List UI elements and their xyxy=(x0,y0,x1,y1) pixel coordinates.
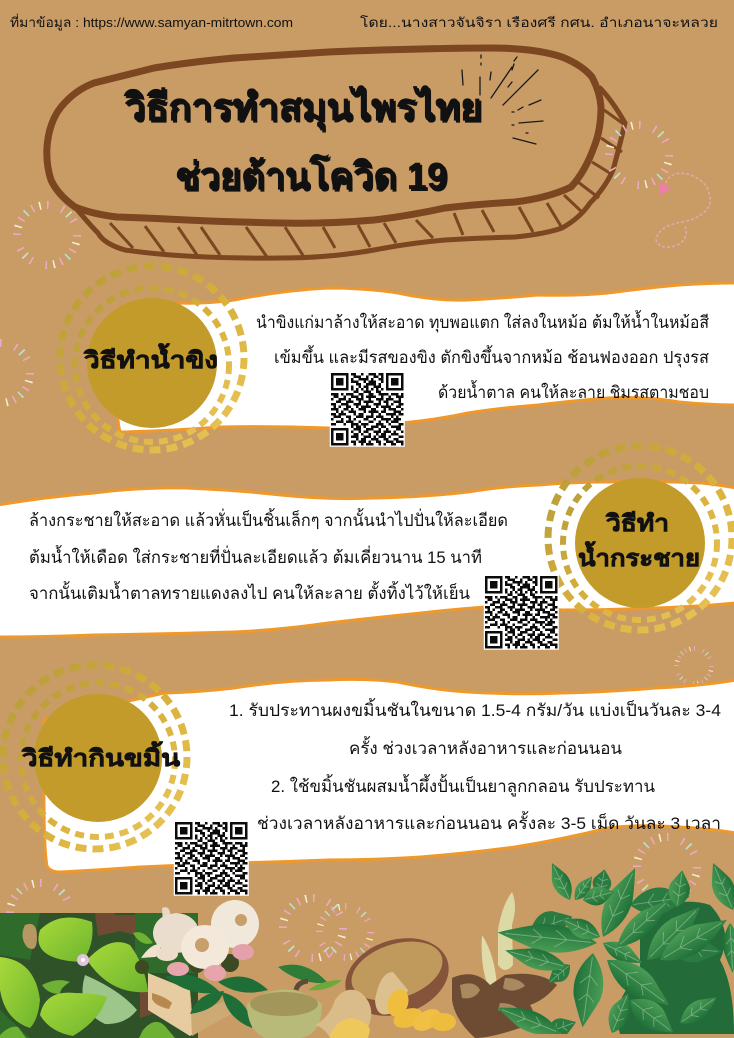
decorative tick ring top right xyxy=(609,125,669,185)
basil leaves xyxy=(165,975,268,1028)
pink dashed swirl xyxy=(656,173,710,247)
dark foliage behind xyxy=(618,902,734,1034)
QR code xyxy=(174,821,249,896)
photo: fingerroot rhizome xyxy=(452,892,557,1038)
body text: 1. รับประทานผงขมิ้นชันในขนาด 1.5-4 กรัม/วัน แบ่งเป็นวันละ 3-4 xyxy=(229,698,721,720)
white band xyxy=(0,482,734,637)
front leaves xyxy=(498,924,597,953)
decorative tick ring title left xyxy=(17,205,77,265)
title line two: ช่วยต้านโควิด 19 xyxy=(177,155,449,200)
heading: วิธีทำกินขมิ้น xyxy=(21,741,180,771)
panel: lemongrass drink xyxy=(0,446,734,650)
title banner xyxy=(47,48,625,258)
heading circle xyxy=(34,694,162,822)
title line one: วิธีการทำสมุนไพรไทย xyxy=(125,87,484,133)
banner underside with hatching xyxy=(75,87,625,258)
body text xyxy=(29,508,508,603)
body text: 2. ใช้ขมิ้นชันผสมน้ำผึ้งปั้นเป็นยาลูกกลอน รับประทาน xyxy=(271,774,655,797)
photo: green andrographis plant xyxy=(493,859,734,1038)
decorative tick ring band one left xyxy=(0,343,30,403)
body text: จากนั้นเติมน้ำตาลทรายแดงลงไป คนให้ละลาย ตั้งทิ้งไว้ให้เย็น xyxy=(29,581,470,603)
white band xyxy=(44,679,734,872)
panel: eating turmeric xyxy=(3,665,734,896)
body text: นำขิงแก่มาล้างให้สะอาด ทุบพอแตก ใส่ลงในหม้อ ต้มให้น้ำในหม้อสี xyxy=(256,310,710,333)
parsley xyxy=(135,954,239,974)
heading: วิธีทำน้ำขิง xyxy=(83,343,218,373)
heading xyxy=(578,511,700,571)
decorative tick rings bottom xyxy=(10,837,697,958)
body text: ต้มน้ำให้เดือด ใส่กระชายที่ปั่นละเอียดแล้ว ต้มเคี่ยวนาน 15 นาที xyxy=(29,545,482,567)
heading: วิธีทำ xyxy=(605,511,669,536)
banner outline xyxy=(47,48,601,223)
dashed gold rings xyxy=(3,665,187,849)
body text xyxy=(256,310,710,402)
author line: โดย...นางสาวจันจิรา เรืองศรี กศน. อำเภอนาจะหลวย xyxy=(360,15,718,30)
dashed gold rings xyxy=(548,446,732,630)
decorative tick ring mid right xyxy=(677,649,711,683)
heading circle xyxy=(87,298,217,428)
dashed gold rings xyxy=(60,266,244,450)
title banner: วิธีการทำสมุนไพรไทย xyxy=(123,85,482,131)
QR code xyxy=(484,575,559,650)
body text: ด้วยน้ำตาล คนให้ละลาย ชิมรสตามชอบ xyxy=(438,380,709,402)
title banner: ช่วยต้านโควิด 19 xyxy=(175,153,447,198)
heading circle xyxy=(575,478,705,608)
photo: green herb powder bowl xyxy=(247,965,342,1038)
panel: ginger drink xyxy=(60,266,734,450)
source line: ที่มาข้อมูล : https://www.samyan-mitrtown.com xyxy=(10,14,293,31)
body text: ล้างกระชายให้สะอาด แล้วหั่นเป็นชิ้นเล็กๆ จากนั้นนำไปปั่นให้ละเอียด xyxy=(29,508,508,530)
photo: green forest leaves xyxy=(0,913,198,1038)
burst marks xyxy=(462,55,543,144)
heading: น้ำกระชาย xyxy=(578,541,700,571)
body text: ครั้ง ช่วงเวลาหลังอาหารและก่อนนอน xyxy=(349,736,622,758)
body text xyxy=(229,698,721,833)
white band xyxy=(117,283,734,432)
wooden box xyxy=(148,973,233,1036)
garlic bulbs xyxy=(153,900,259,969)
photo: ginger and powder bowl xyxy=(315,925,459,1038)
photo: garlic, box and herbs xyxy=(135,900,268,1036)
QR code xyxy=(330,372,405,447)
body text: เข้มขึ้น และมีรสของขิง ตักขิงขึ้นจากหม้อ ช้อนฟองออก ปรุงรส xyxy=(274,345,710,368)
garlic cloves xyxy=(141,944,254,981)
back leaves xyxy=(525,868,723,1038)
body text: ช่วงเวลาหลังอาหารและก่อนนอน ครั้งละ 3-5 เม็ด วันละ 3 เวลา xyxy=(257,811,721,833)
